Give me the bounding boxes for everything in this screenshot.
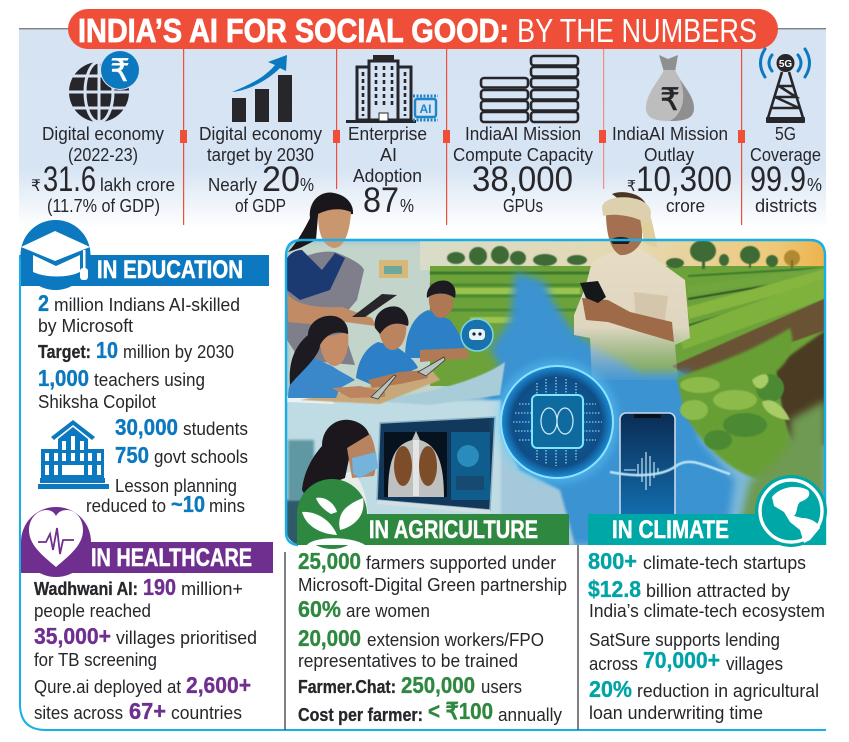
text: healthcare stats [34,574,257,724]
text: climate stats: 70,000+ [643,647,720,673]
text: education stats: 2 [38,290,49,316]
header: in agriculture [297,479,569,549]
title banner: INDIA’S AI FOR SOCIAL GOOD: [78,12,509,49]
text: climate stats: SatSure supports lending [589,630,780,650]
text: education stats: Lesson planning [115,476,237,496]
text: education stats: by Microsoft [38,316,133,336]
header band [19,28,826,228]
photo: farmer [574,192,690,380]
section: climate [588,475,827,723]
text: education stats: mins [209,496,245,516]
icon: server racks [481,56,578,122]
text: agriculture stats: annually [498,705,562,725]
text: coverage figures: 99.9 [750,160,806,199]
text: education stats: 1,000 [38,365,89,391]
text: compute figures: IndiaAI Mission [465,124,581,144]
text: target figures: target by 2030 [207,145,314,165]
header: in climate: IN CLIMATE [612,516,729,544]
text: outlay figures: IndiaAI Mission [612,124,728,144]
photo background: field, classroom, lab, map [286,240,826,546]
stat: digital economy target [199,55,322,216]
text: coverage figures: 5G [775,124,796,144]
text: target figures: 20 [262,160,300,199]
text: agriculture stats: Farmer.Chat: [298,677,396,697]
header: in agriculture: IN AGRICULTURE [369,516,538,544]
title banner [68,9,778,49]
section: healthcare [21,507,273,724]
text: climate stats: 20% [589,676,632,702]
icon: robot badge [461,319,493,351]
text: healthcare stats: countries [171,703,242,723]
text: healthcare stats: 67+ [129,698,166,724]
text: education stats: 750 [115,442,149,468]
text: agriculture stats: Microsoft-Digital Green partnership [298,575,567,595]
text: healthcare stats: people reached [34,601,151,621]
text: enterprise figures: % [400,196,414,216]
text: agriculture stats: extension workers/FPO [367,630,544,650]
text: outlay figures [612,124,732,216]
icon: office building with AI chip [346,55,438,123]
text: healthcare stats: for TB screening [34,650,157,670]
text: education stats: Target: [38,342,91,362]
text: climate stats: billion attracted by [646,581,790,601]
title banner: BY THE NUMBERS [517,12,757,49]
text: enterprise figures: 87 [363,181,399,220]
text: coverage figures [750,124,822,216]
icon: globe with rupee [69,50,140,122]
text: agriculture stats: 60% [298,596,341,622]
text: agriculture stats: farmers supported under [366,553,556,573]
text: climate stats: across [589,654,638,674]
text: agriculture stats: representatives to be trained [298,651,518,671]
text: target figures: % [300,175,314,195]
header: in healthcare [21,507,273,577]
text: coverage figures: % [807,175,822,195]
icon: 5G tower: 5G [779,59,792,70]
photo: doctor [302,420,378,520]
text: climate stats: India’s climate-tech ecosystem [589,601,825,621]
text: climate stats: $12.8 [588,576,641,602]
text: target figures: of GDP [235,196,286,216]
text: digital economy figures [31,124,175,216]
stat: 5G coverage [750,49,822,216]
panel border [286,240,825,545]
text: compute figures: Compute Capacity [453,145,593,165]
text: climate stats: loan underwriting time [589,703,763,723]
stat: compute capacity [453,56,593,216]
text: education stats: students [183,419,248,439]
icon: 5G tower [760,49,810,123]
text: education stats [38,290,248,517]
text: agriculture stats: users [481,677,522,697]
text: healthcare stats: Qure.ai deployed at [34,677,181,697]
icon: school building [38,420,109,489]
text: education stats: million Indians AI-skilled [54,295,240,315]
text: target figures: Digital economy [199,124,322,144]
text: climate stats: 800+ [588,548,637,574]
text: healthcare stats: villages prioritised [116,628,257,648]
stat: enterprise AI adoption [346,55,438,220]
text: healthcare stats: sites across [34,703,123,723]
text: agriculture stats: 250,000 [401,672,475,698]
stat: mission outlay [612,55,732,216]
text: outlay figures: Outlay [644,145,694,165]
text: outlay figures: 10,300 [636,160,732,199]
text: healthcare stats: 35,000+ [34,623,111,649]
photo: smartphone [610,413,730,523]
icon: globe with rupee: ₹ [110,53,130,88]
text: education stats: ~10 [171,491,205,517]
text: compute figures [453,124,593,216]
text: healthcare stats: 190 [143,574,176,600]
text: enterprise figures: AI [380,145,397,165]
text: agriculture stats: Cost per farmer: [298,705,423,725]
section: education [20,220,269,517]
photo: teacher [287,192,397,365]
text: digital economy figures: (11.7% of GDP) [47,196,160,216]
text: education stats: 30,000 [115,414,178,440]
text: coverage figures: districts [755,196,817,216]
text: enterprise figures: Adoption [353,166,422,186]
header: in education: IN EDUCATION [97,256,243,284]
header: in education [20,220,269,290]
text: education stats: govt schools [154,447,248,467]
section: agriculture [297,479,569,725]
photo: students [288,280,470,404]
icon: rupee money bag [646,55,694,121]
text: target figures [199,124,322,216]
text: climate stats [588,548,825,723]
text: education stats: 10 [96,337,118,363]
text: healthcare stats: 2,600+ [186,672,251,698]
text: education stats: million by 2030 [123,342,234,362]
text: healthcare stats: million+ [181,579,243,599]
photo: AI chip [495,360,619,484]
icon: rupee money bag: ₹ [660,82,680,117]
text: outlay figures: crore [666,196,705,216]
text: digital economy figures: (2022-23) [68,145,138,165]
text: digital economy figures: 31.6 [43,160,96,199]
text: compute figures: GPUs [503,196,543,216]
text: education stats: reduced to [86,496,166,516]
text: agriculture stats: 25,000 [298,548,361,574]
icon: office building with AI chip: AI [420,102,432,116]
text: agriculture stats [298,548,567,725]
text: agriculture stats: < ₹100 [428,698,493,724]
text: education stats: Shiksha Copilot [38,392,156,412]
text: digital economy figures: ₹ [31,178,41,195]
text: enterprise figures [348,124,427,220]
text: healthcare stats: Wadhwani AI: [34,579,138,599]
header: in climate [588,475,827,547]
composite photo panel [286,192,826,546]
text: climate stats: villages [726,654,783,674]
text: agriculture stats: are women [346,601,430,621]
text: agriculture stats: 20,000 [298,625,361,651]
photo: xray monitor [377,417,495,514]
stat: digital economy [31,50,175,216]
text: climate stats: reduction in agricultural [637,681,819,701]
panel outlines [20,255,826,730]
text: climate stats: climate-tech startups [643,553,806,573]
text: outlay figures: ₹ [627,178,636,195]
text: coverage figures: Coverage [750,145,821,165]
text: education stats: teachers using [94,370,205,390]
header: in healthcare: IN HEALTHCARE [91,544,252,572]
text: digital economy figures: lakh crore [100,175,175,195]
text: digital economy figures: Digital economy [42,124,164,144]
icon: rising bar chart [232,55,292,122]
text: target figures: Nearly [208,175,257,195]
text: enterprise figures: Enterprise [348,124,427,144]
text: compute figures: 38,000 [472,160,573,199]
column dividers [180,49,745,225]
